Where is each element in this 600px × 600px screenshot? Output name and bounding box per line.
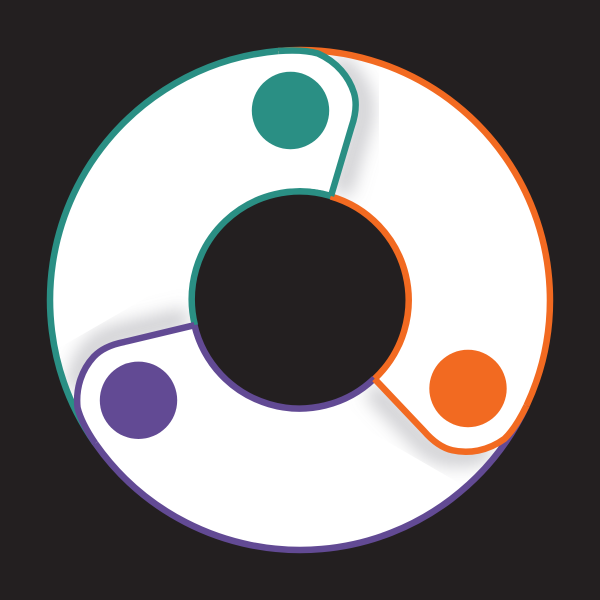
- panel: purple tab: [56, 304, 221, 444]
- teal circle: [252, 72, 329, 149]
- white ring base: [50, 50, 550, 550]
- inner ring arcs: [190, 191, 448, 448]
- tab drop shadows: [62, 62, 489, 474]
- panel: orange tab: [362, 333, 527, 473]
- purple circle: [100, 362, 177, 439]
- teal tab outline: [278, 50, 356, 196]
- orange circle: [429, 350, 507, 427]
- purple tab outline: [56, 304, 221, 444]
- orange tab outline: [362, 333, 527, 473]
- panel: teal tab: [252, 50, 356, 196]
